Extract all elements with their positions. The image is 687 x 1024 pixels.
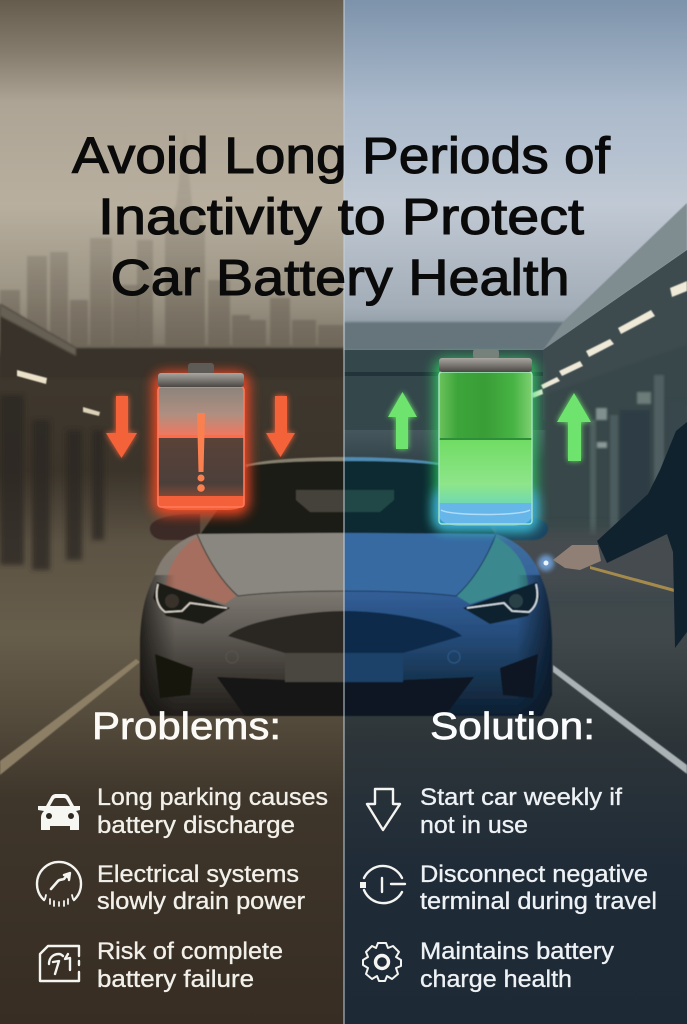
- red down arrow left: [106, 396, 137, 458]
- low-charge red battery: [153, 363, 249, 515]
- heading: solution: Solution:: [430, 706, 595, 748]
- text: disconnect: Disconnect negative: [420, 861, 648, 888]
- text: start car: [420, 784, 622, 839]
- text: start car: Start car weekly if: [420, 784, 622, 811]
- text: disconnect: [420, 861, 657, 915]
- text: risk: battery failure: [97, 966, 254, 993]
- text: maintains: [420, 938, 614, 993]
- text: disconnect: terminal during travel: [420, 888, 657, 915]
- title: Inactivity to Protect: [98, 188, 584, 245]
- background: right side, bright parking garage: [344, 0, 687, 1024]
- text: risk: Risk of complete: [97, 938, 283, 965]
- title: Car Battery Health: [110, 249, 570, 306]
- icon: car: [38, 794, 80, 830]
- exclamation mark: [197, 413, 205, 492]
- text: risk: [97, 938, 283, 993]
- text: electrical systems: slowly drain power: [97, 888, 305, 915]
- icon: disconnect terminal: [360, 866, 405, 903]
- charged green battery: [434, 349, 537, 530]
- car: front view split in two halves: [140, 457, 552, 716]
- icon: gauge: [37, 862, 81, 906]
- red down arrow right: [266, 396, 295, 457]
- text: long parking: [97, 784, 328, 839]
- text: electrical systems: Electrical systems: [97, 861, 299, 888]
- text: long parking: battery discharge: [97, 812, 295, 839]
- icon: gear: [363, 943, 401, 981]
- panel: solution list: [360, 784, 657, 993]
- text: maintains: charge health: [420, 966, 572, 993]
- background: left side, dim parking garage: [0, 0, 344, 1024]
- green up arrow right: [557, 393, 591, 461]
- car right half, blue: [344, 457, 552, 716]
- title: Avoid Long Periods of: [72, 127, 611, 184]
- green up arrow left: [388, 392, 417, 449]
- title: [72, 127, 611, 306]
- text: start car: not in use: [420, 812, 528, 839]
- icon: risk gauge box: [40, 946, 79, 981]
- center divider: [343, 0, 345, 1024]
- text: maintains: Maintains battery: [420, 938, 614, 965]
- text: electrical systems: [97, 861, 305, 915]
- person reaching toward car with glowing key: [538, 422, 687, 648]
- car left half, grey: [140, 457, 345, 716]
- heading: problems: Problems:: [92, 706, 281, 748]
- text: long parking: Long parking causes: [97, 784, 328, 811]
- panel: problems list: [37, 784, 328, 993]
- icon: down arrow outline: [367, 789, 400, 830]
